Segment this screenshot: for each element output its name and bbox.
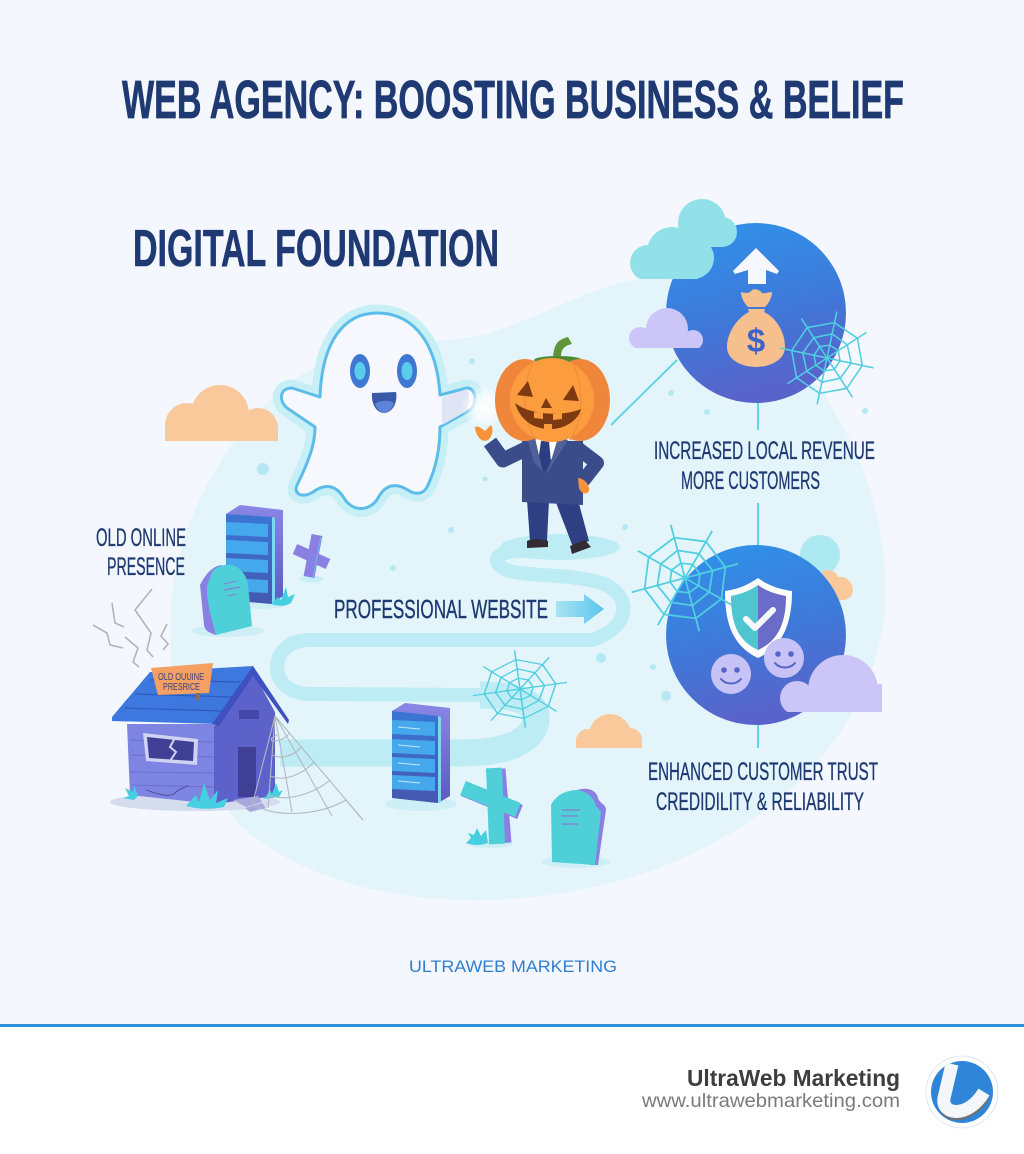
background blob [170, 278, 886, 900]
icon: corner cobweb [252, 716, 363, 820]
cloud: orange left [165, 385, 278, 441]
sign on roof [151, 663, 213, 700]
text: enhanced customer trust: ENHANCED CUSTOMER TRUST [648, 758, 878, 786]
cloud: lavender lower [780, 655, 882, 712]
icon: tombstone left [192, 565, 264, 637]
cloud: lavender upper [629, 308, 703, 350]
cobweb centre [468, 644, 572, 734]
cloud: orange bottom [576, 714, 642, 748]
arrow [556, 594, 604, 624]
text: increased local revenue: MORE CUSTOMERS [681, 467, 820, 495]
icon: up arrow [733, 248, 779, 284]
icon: tombstone right [542, 789, 610, 868]
cobweb top right [771, 302, 883, 414]
icon: smiley right [764, 638, 804, 678]
icon: electric squiggles [93, 589, 168, 667]
sign on roof: OLD OUUINE [158, 671, 204, 683]
text: enhanced customer trust: CREDIDILITY & RELIABILITY [656, 788, 864, 816]
brand caption: ULTRAWEB MARKETING [409, 958, 617, 976]
decor: teal circle and orange cloud behind trust [800, 535, 853, 600]
panel: increased revenue circle [666, 223, 846, 403]
icon: purple cross [295, 535, 328, 582]
cloud: teal top [630, 199, 737, 281]
icon: smiley left [711, 654, 751, 694]
floating dots [257, 358, 868, 701]
panel: customer trust circle [666, 545, 846, 725]
icon: teal cross [463, 768, 520, 848]
icon: ghost [281, 313, 505, 508]
text: enhanced customer trust [648, 758, 878, 816]
winding path [277, 551, 624, 753]
icon: server top [226, 505, 295, 609]
icon: shield [725, 578, 792, 658]
connector lines [611, 360, 758, 748]
footer brand name: UltraWeb Marketing [687, 1065, 900, 1091]
text: increased local revenue: INCREASED LOCAL REVENUE [654, 437, 875, 465]
logo [926, 1056, 998, 1128]
icon: money bag [727, 289, 785, 367]
footer band [0, 1024, 1024, 1154]
label: old online presence [96, 524, 186, 581]
icon: server bottom [385, 703, 457, 811]
label: old online presence: OLD ONLINE [96, 524, 186, 552]
label: old online presence: PRESENCE [107, 553, 185, 581]
icon: money bag: $ [747, 322, 765, 359]
sign on roof: PRESRICE [163, 682, 200, 693]
label: professional website: PROFESSIONAL WEBSITE [334, 594, 548, 624]
footer url: www.ultrawebmarketing.com [641, 1090, 900, 1112]
text: increased local revenue [654, 437, 875, 495]
character: pumpkin-head businessman [475, 337, 620, 560]
icon: abandoned house [110, 663, 289, 812]
section heading: digital foundation: DIGITAL FOUNDATION [133, 220, 499, 278]
cobweb mid [618, 511, 752, 645]
